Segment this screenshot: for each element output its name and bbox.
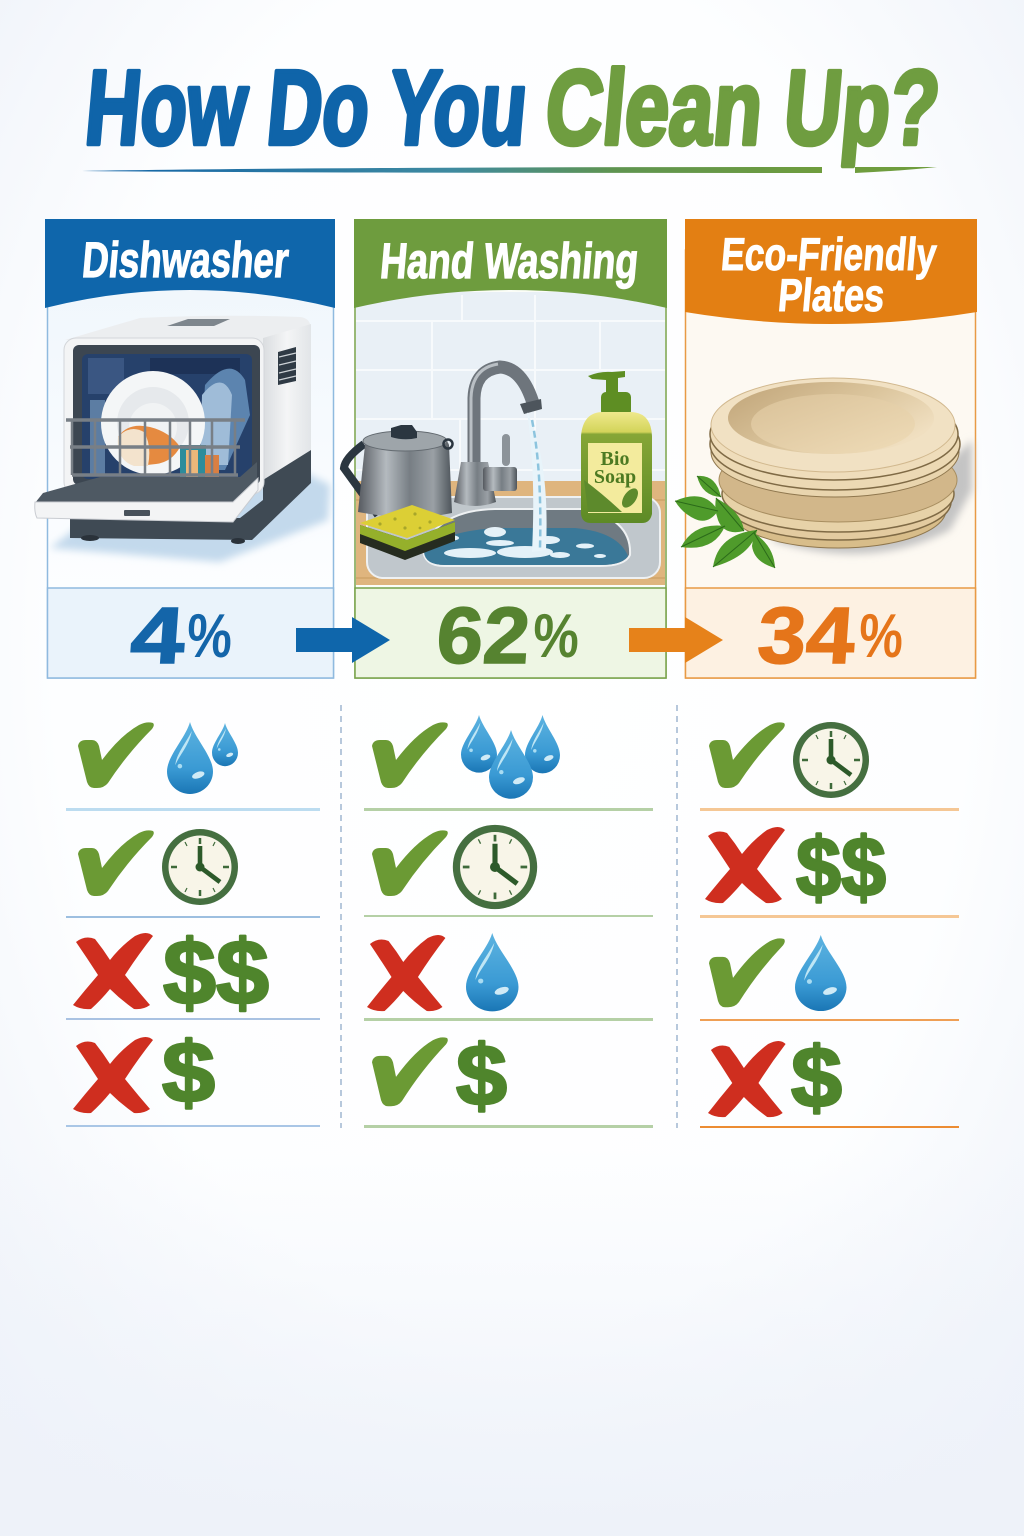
panel: hand washing (344, 219, 667, 680)
header: dishwasher (45, 219, 335, 308)
title: How Do You (81, 48, 532, 167)
stat: 34%: 34 (755, 590, 859, 680)
panel: eco-friendly plates (675, 219, 977, 680)
ratings: eco-friendly plates (700, 722, 959, 1128)
cost: cross, one dollar: $ (162, 1025, 215, 1121)
time: check, clock (78, 829, 238, 905)
soap bottle: Bio (601, 448, 629, 470)
stat: 62%: % (531, 602, 581, 671)
arrow: blue (296, 617, 390, 663)
cost: cross, two dollars (73, 922, 269, 1024)
kettle (344, 425, 452, 517)
stat: 62% (355, 588, 666, 680)
illustration: dishwasher (35, 316, 330, 562)
cost: cross, dollar (708, 1030, 842, 1126)
leaves (675, 476, 775, 568)
soap bottle (581, 371, 652, 523)
stat: 34%: % (857, 602, 905, 671)
cost: cross, two dollars: $$ (163, 922, 269, 1024)
arrow: orange (629, 617, 723, 663)
sponge (360, 505, 455, 560)
cost: cross, two dollars: $$ (796, 820, 886, 914)
header: dishwasher: Dishwasher (80, 232, 291, 288)
header: eco-friendly plates (685, 219, 977, 324)
cost: cross, two dollars (705, 820, 886, 914)
water: check, two drops (78, 722, 238, 794)
stat: 4%: 4 (128, 590, 189, 680)
panel: dishwasher (35, 219, 335, 680)
ratings: dishwasher (66, 722, 320, 1127)
illustration: plate stack (675, 378, 972, 568)
header: hand washing: Hand Washing (378, 233, 641, 289)
soap bottle: Soap (594, 466, 636, 488)
cost: cross, dollar: $ (791, 1030, 842, 1126)
illustration: sink (344, 292, 665, 585)
stat: 62%: 62 (434, 590, 533, 680)
time: check, clock (709, 722, 869, 798)
stat: 4%: % (185, 602, 234, 671)
water stream (527, 412, 547, 552)
ratings: hand washing (364, 715, 653, 1128)
stat: 4% (48, 588, 334, 680)
title underline (82, 167, 937, 173)
faucet (454, 364, 542, 506)
cost: cross, one dollar (73, 1025, 215, 1121)
cost: check, dollar: $ (456, 1028, 507, 1124)
header: eco-friendly plates: Plates (776, 269, 887, 321)
cost: check, dollar (372, 1028, 507, 1124)
header: eco-friendly plates: Eco-Friendly (719, 228, 939, 280)
water: check, drop (709, 935, 846, 1011)
time: check, clock (372, 825, 537, 909)
water: cross, drop (367, 933, 518, 1011)
water: check, three drops (372, 715, 560, 799)
header: hand washing (354, 219, 667, 308)
sink basin (367, 497, 660, 578)
stat: 34% (686, 588, 976, 680)
